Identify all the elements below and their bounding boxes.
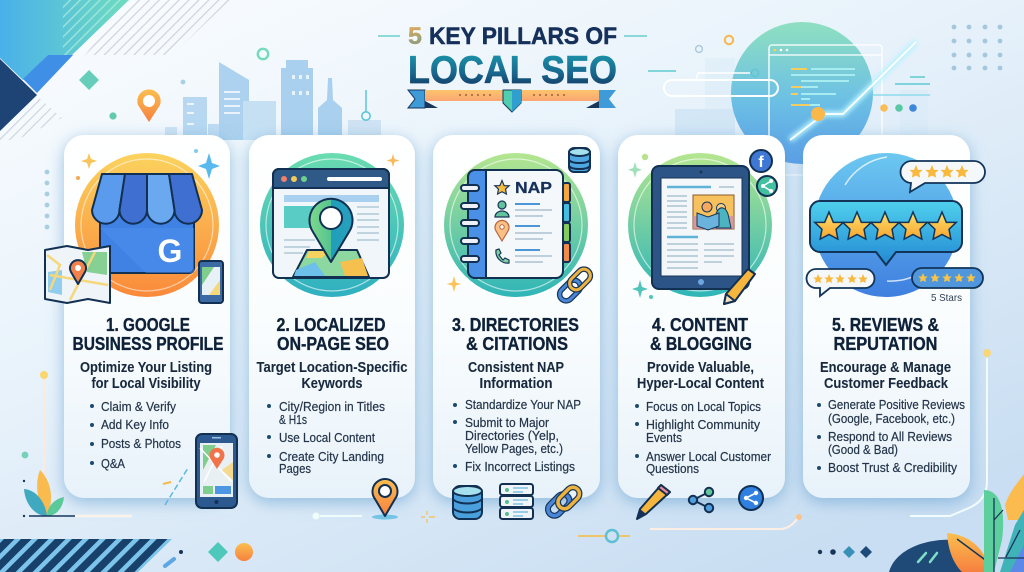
top-right tech illustration <box>648 22 930 175</box>
heading <box>452 315 579 354</box>
subtitle: Customer Feedback <box>824 376 949 392</box>
stripes, bottom left <box>0 539 172 572</box>
subtitle: Target Location-Specific <box>256 360 408 376</box>
subtitle: for Local Visibility <box>92 376 200 392</box>
subtitle <box>80 360 212 392</box>
bullet list: Boost Trust & Credibility <box>828 461 958 475</box>
bullet list: (Google, Facebook, etc.) <box>828 412 955 426</box>
icon: database top <box>569 148 590 172</box>
bullet list: Add Key Info <box>101 418 169 432</box>
icon: chain link, bottom of panel 3 <box>545 485 582 518</box>
icon: storefront with map and phone <box>45 149 223 303</box>
heading: REPUTATION <box>834 334 938 354</box>
bullet list: Submit to Major <box>465 416 549 430</box>
bullet list: Yellow Pages, etc.) <box>465 442 563 456</box>
panel: Localized On-Page SEO <box>249 135 415 498</box>
dot grid, top right <box>952 25 1002 70</box>
icon: facebook badge <box>750 150 772 172</box>
bullet list: Respond to All Reviews <box>828 430 952 444</box>
bullet list: Directories (Yelp, <box>465 429 559 443</box>
bullet list: Create City Landing <box>279 450 384 464</box>
shapes, bottom right <box>818 546 872 558</box>
title: 5 <box>408 23 422 50</box>
bullet list: Events <box>646 431 682 445</box>
icon: star rating bubbles: 5 Stars <box>931 292 962 304</box>
bullet list <box>453 398 581 474</box>
bullet list: Q&A <box>101 457 126 471</box>
heading: 1. GOOGLE <box>106 315 190 335</box>
icon: server list, bottom of panel 3 <box>500 484 533 519</box>
title <box>378 23 647 92</box>
subtitle <box>256 360 408 392</box>
bullet list: Generate Positive Reviews <box>828 398 965 412</box>
heading: ON-PAGE SEO <box>277 334 389 354</box>
subtitle: Optimize Your Listing <box>80 360 212 376</box>
heading: & CITATIONS <box>466 334 568 354</box>
glow connector lines <box>40 349 991 542</box>
icon: phone with map, bottom of panel 1 <box>163 434 237 508</box>
subtitle: Consistent NAP <box>468 360 564 376</box>
icon: NAP notebook: NAP <box>515 180 552 197</box>
panel: Content & Blogging <box>618 135 785 498</box>
bullet list: & H1s <box>279 413 307 427</box>
subtitle: Encourage & Manage <box>820 360 951 376</box>
subtitle: Keywords <box>302 376 362 392</box>
subtitle <box>637 360 764 392</box>
heading <box>650 315 752 354</box>
icon: pencil top <box>724 269 755 304</box>
shapes, bottom left <box>165 542 253 566</box>
skyline illustration <box>165 60 381 140</box>
bullet list <box>90 400 181 471</box>
bullet list <box>635 400 771 476</box>
plant, bottom left <box>22 452 75 517</box>
top-left geometric decoration <box>0 0 230 140</box>
bullet list: Use Local Content <box>279 431 375 445</box>
icon: share circle, bottom of panel 4 <box>739 486 763 510</box>
left dotted column <box>45 170 49 229</box>
heading: 3. DIRECTORIES <box>452 315 579 335</box>
bullet list: (Good & Bad) <box>828 443 898 457</box>
bullet list: Focus on Local Topics <box>646 400 761 414</box>
icon: database, bottom of panel 3 <box>453 486 482 519</box>
bullet list: Pages <box>279 462 311 476</box>
title: LOCAL SEO <box>408 49 617 92</box>
decorative pin and shapes, top left <box>79 49 268 122</box>
heading: & BLOGGING <box>650 334 752 354</box>
icon: NAP notebook <box>444 153 588 297</box>
heading: 2. LOCALIZED <box>276 315 386 335</box>
icon: share nodes, bottom of panel 4 <box>689 488 713 512</box>
subtitle <box>820 360 951 392</box>
heading: BUSINESS PROFILE <box>72 334 224 354</box>
icon: chain link top <box>557 266 593 304</box>
icon: share badge <box>757 176 777 196</box>
heading: 4. CONTENT <box>652 315 748 335</box>
icon: tablet article <box>628 153 772 299</box>
subtitle: Information <box>480 376 552 392</box>
bullet list: Highlight Community <box>646 418 761 432</box>
title ribbon <box>408 90 616 112</box>
panel: Reviews & Reputation <box>803 135 985 498</box>
bullet list <box>817 398 965 475</box>
icon: map pin, bottom of panel 2 <box>372 479 398 520</box>
icon: storefront with map and phone: G <box>158 233 182 269</box>
plants and blob, bottom right <box>889 474 1024 572</box>
bullet list: Questions <box>646 462 699 476</box>
subtitle: Hyper-Local Content <box>637 376 764 392</box>
bullet list: Claim & Verify <box>101 400 177 414</box>
heading: 5. REVIEWS & <box>832 315 939 335</box>
bullet list: Posts & Photos <box>101 437 181 451</box>
bullet list: Standardize Your NAP <box>465 398 581 412</box>
subtitle: Provide Valuable, <box>647 360 754 376</box>
icon: star rating bubbles <box>806 153 985 304</box>
bullet list <box>267 400 385 476</box>
icon: browser with map pin <box>260 153 404 297</box>
bullet list: City/Region in Titles <box>279 400 385 414</box>
icon: facebook badge: f <box>758 154 764 171</box>
title: KEY PILLARS OF <box>429 23 617 50</box>
heading <box>276 315 389 354</box>
heading <box>72 315 224 354</box>
panel: Directories & Citations <box>433 135 600 498</box>
panel: Google Business Profile <box>45 135 230 498</box>
icon: pencil, bottom of panel 4 <box>637 485 670 519</box>
bullet list: Answer Local Customer <box>646 450 771 464</box>
heading <box>832 315 939 354</box>
subtitle <box>468 360 564 392</box>
bullet list: Fix Incorrect Listings <box>465 460 575 474</box>
